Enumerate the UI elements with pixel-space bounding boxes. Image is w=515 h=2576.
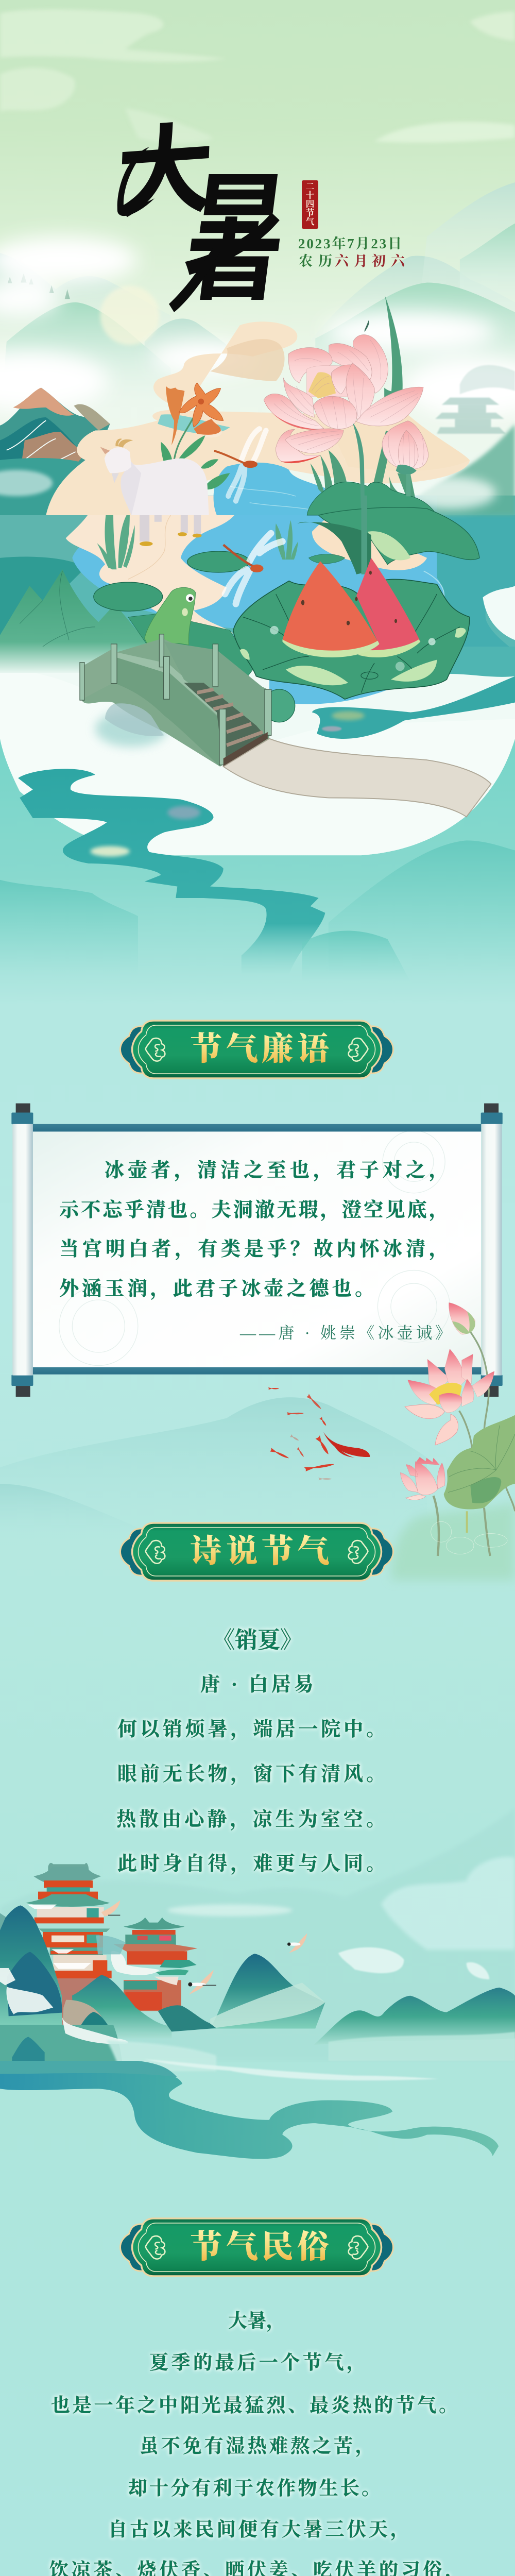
folk customs text: 大暑， xyxy=(228,2310,285,2332)
seal: 二十四节气: 气 xyxy=(306,216,314,227)
ripples xyxy=(431,1521,507,1554)
scroll text xyxy=(59,1160,449,1300)
big lily leaf under the lotus xyxy=(307,482,437,515)
folk customs text: 夏季的最后一个节气， xyxy=(149,2352,366,2374)
distant misty mountains xyxy=(0,182,515,420)
calligraphy title: 暑 xyxy=(175,127,300,328)
banner: 节气廉语: 节气廉语 xyxy=(190,1031,329,1067)
leaf xyxy=(444,1415,515,1510)
lunar date: 六月初六 xyxy=(335,253,406,269)
folk customs text xyxy=(49,2310,464,2576)
grass clumps xyxy=(97,515,298,569)
folk customs text: 虽不免有湿热难熬之苦， xyxy=(140,2435,374,2457)
calligraphy title: 大 xyxy=(114,89,216,238)
hero illustration: summer lotus pond scene xyxy=(0,9,515,982)
banner: 诗说节气 xyxy=(121,1523,393,1581)
crane, flying right xyxy=(287,1934,307,1953)
colourful left mountains xyxy=(0,388,110,515)
second lotus xyxy=(400,1457,445,1500)
pond foreground xyxy=(0,496,515,982)
seal: 二十四节气: 二 xyxy=(306,182,314,192)
folk customs text: 却十分有利于农作物生长。 xyxy=(128,2478,381,2499)
scroll paper xyxy=(33,1124,481,1375)
winding blue-green ribbon river xyxy=(0,2059,499,2159)
seal: 二十四节气: 十 xyxy=(306,191,314,200)
green mountains, left xyxy=(0,569,146,673)
lotus flower xyxy=(264,335,428,532)
stone bridge xyxy=(80,634,271,767)
poem verses: 热散由心静，凉生为室空。 xyxy=(116,1809,386,1831)
red pagodas and mountains xyxy=(0,1863,216,2071)
attribution: ——唐 · 姚崇《冰壶诫》 xyxy=(239,1324,451,1342)
goat xyxy=(100,438,209,515)
top clouds xyxy=(0,9,515,144)
poem author: 唐 · 白居易 xyxy=(200,1674,314,1696)
banner: 节气民俗: 节气民俗 xyxy=(190,2229,331,2265)
big lily leaf with watermelon xyxy=(233,496,479,699)
left roller xyxy=(11,1104,33,1397)
poem verses: 眼前无长物，窗下有清风。 xyxy=(117,1764,386,1786)
bud xyxy=(449,1302,475,1334)
seal: 二十四节气 xyxy=(302,180,318,229)
dragonfly, upper xyxy=(214,429,266,501)
folk customs text: 自古以来民间便有大暑三伏天， xyxy=(108,2519,409,2540)
orange lily xyxy=(161,383,230,489)
beige cloud island xyxy=(46,321,470,515)
scroll text: 外涵玉润，此君子冰壶之德也。 xyxy=(59,1278,374,1300)
right mountain with mist xyxy=(414,424,515,515)
poem verses xyxy=(116,1719,386,1875)
cranes xyxy=(101,1900,216,1995)
lotus stems and blades xyxy=(311,296,416,499)
grey pagoda in the mist xyxy=(435,365,515,434)
date: 2023年7月23日 xyxy=(298,236,402,251)
banner: 诗说节气: 诗说节气 xyxy=(190,1534,330,1569)
folk customs text: 也是一年之中阳光最猛烈、最炎热的节气。 xyxy=(51,2395,458,2416)
poem verses: 此时身自得，难更与人同。 xyxy=(117,1853,386,1875)
teal pool, right xyxy=(312,676,515,739)
white mist band xyxy=(0,670,515,855)
goat legs xyxy=(140,515,201,541)
main lotus xyxy=(427,1359,450,1391)
calligraphy title xyxy=(114,89,300,328)
scroll panel xyxy=(11,1104,503,1397)
distant hills and clouds behind poem xyxy=(0,1808,515,2061)
seal: 二十四节气: 节 xyxy=(306,208,314,218)
pond ground: water and sand xyxy=(0,496,515,855)
pond water xyxy=(214,463,341,515)
back mountains xyxy=(0,1905,216,2071)
lily pads xyxy=(94,582,163,611)
right distant mountains and center peak xyxy=(210,1954,515,2061)
scroll text: 冰壶者，清洁之至也，君子对之， xyxy=(105,1160,449,1182)
dragonfly, lower xyxy=(224,533,282,604)
pink lotus flowers with leaf xyxy=(391,1302,515,1580)
right roller xyxy=(481,1104,503,1397)
distant hills xyxy=(0,1397,427,1546)
pagoda two xyxy=(111,1918,197,2011)
scroll text: 示不忘乎清也。夫洞澈无瑕，澄空见底， xyxy=(59,1199,449,1222)
winding river xyxy=(18,769,325,975)
wooden walkway xyxy=(224,739,491,817)
koi fish xyxy=(268,1387,370,1480)
watermelon slices xyxy=(282,558,420,657)
pagoda one xyxy=(26,1863,112,2025)
scroll bands xyxy=(33,1124,481,1375)
frog xyxy=(145,587,195,645)
poem title: 《销夏》 xyxy=(212,1628,303,1653)
poem verses: 何以销烦暑，端居一院中。 xyxy=(117,1719,386,1741)
lunar date: 农历 xyxy=(298,253,332,269)
scroll text: 当宫明白者，有类是乎？故内怀冰清， xyxy=(59,1239,449,1261)
green water wash xyxy=(391,1503,515,1580)
soft teal hills xyxy=(0,840,515,982)
banner: 节气廉语 xyxy=(121,1021,393,1078)
seal: 二十四节气: 四 xyxy=(306,199,314,209)
banner: 节气民俗 xyxy=(121,2218,393,2276)
